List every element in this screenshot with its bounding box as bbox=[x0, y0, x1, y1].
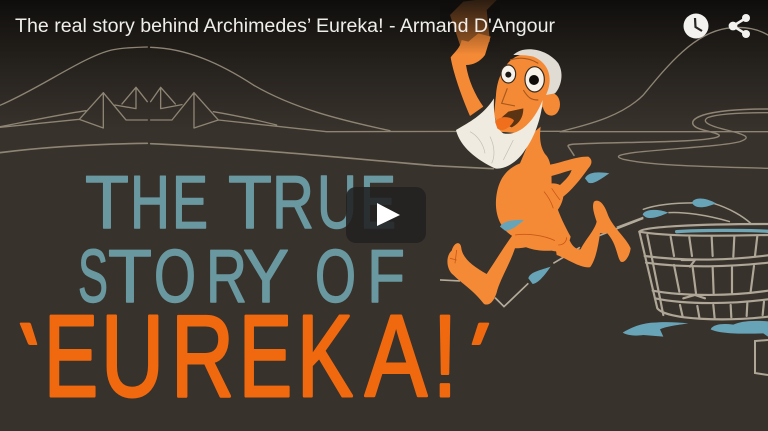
arm on hip bbox=[540, 157, 591, 215]
heading: eureka: E bbox=[44, 291, 98, 421]
torso bbox=[496, 127, 571, 251]
icon: clock bbox=[684, 14, 708, 38]
heading: the true story of: S bbox=[78, 234, 108, 318]
heading: eureka: K bbox=[297, 291, 353, 421]
heading: the true story of: R bbox=[206, 234, 247, 318]
back leg bbox=[555, 201, 631, 267]
splash path under foot bbox=[440, 218, 643, 307]
drops on figure bbox=[585, 172, 609, 183]
heading: eureka: ! bbox=[433, 291, 457, 421]
heading: the true story of: E bbox=[172, 160, 208, 244]
raised arm bbox=[451, 33, 491, 116]
heading: the true story of: T bbox=[108, 234, 152, 318]
body creases bbox=[450, 234, 567, 263]
hair bbox=[513, 49, 562, 95]
basket rim arc bbox=[643, 203, 751, 223]
beard bbox=[456, 98, 543, 169]
tongue bbox=[495, 117, 514, 130]
fingers bbox=[544, 188, 560, 208]
box corner bbox=[755, 340, 768, 375]
head bbox=[494, 54, 552, 133]
water drops and puddles bbox=[617, 198, 768, 337]
heading: eureka: R bbox=[171, 291, 234, 421]
heading: eureka: A bbox=[365, 291, 428, 421]
video title: The real story behind Archimedes’ Eureka! - Armand D'Angour bbox=[15, 16, 556, 37]
heading: eureka bbox=[10, 291, 499, 421]
heading: the true story of: T bbox=[85, 160, 129, 244]
archimedes figure bbox=[440, 0, 643, 307]
landscape line art bbox=[0, 27, 768, 169]
heading: the true story of: T bbox=[228, 160, 272, 244]
object held up bbox=[450, 0, 500, 45]
heading: eureka: ' bbox=[10, 305, 64, 405]
heading: the true story of: Y bbox=[243, 234, 289, 318]
play button bbox=[346, 187, 426, 243]
heading: the true story of: R bbox=[272, 160, 314, 244]
heading: the true story of: E bbox=[360, 160, 396, 244]
basket bbox=[639, 203, 768, 319]
mouth bbox=[498, 108, 523, 127]
eyes bbox=[501, 65, 516, 83]
heading: eureka: ' bbox=[445, 305, 499, 405]
heading: the true story of: O bbox=[315, 234, 356, 318]
top shade bbox=[0, 0, 768, 130]
face lines bbox=[502, 58, 538, 106]
hand shade bbox=[440, 0, 500, 55]
heading: the true story of: F bbox=[367, 234, 405, 318]
heading: eureka: E bbox=[239, 291, 292, 421]
icon: share bbox=[729, 14, 750, 38]
heading: the true story of bbox=[78, 160, 405, 318]
ear bbox=[543, 93, 560, 116]
heading: the true story of: O bbox=[154, 234, 196, 318]
heading: eureka: U bbox=[101, 291, 164, 421]
front leg bbox=[447, 233, 535, 305]
heading: the true story of: U bbox=[317, 160, 357, 244]
heading: the true story of: H bbox=[130, 160, 170, 244]
